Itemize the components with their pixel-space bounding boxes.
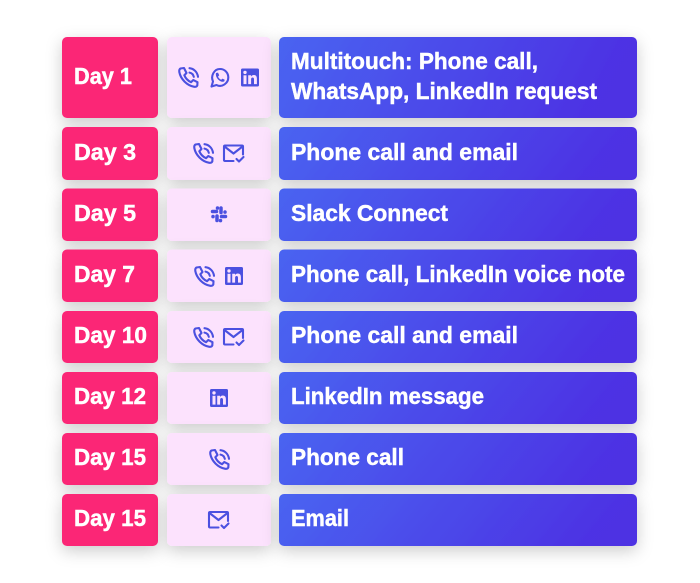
description: Phone call — [291, 444, 404, 470]
icon: Slack — [167, 188, 271, 241]
panel: Day 12 row — [62, 372, 637, 424]
day label: Day 10 — [62, 311, 158, 363]
panel: Day 3 row — [62, 127, 637, 180]
panel: Day 15 phone row — [62, 433, 637, 485]
panel: Day 1 row — [62, 37, 637, 118]
day label: Day 15 — [62, 433, 158, 485]
description: Phone call, LinkedIn voice note — [291, 261, 625, 287]
icon: phone — [167, 433, 271, 485]
day label: Day 15: Day 15 — [74, 444, 146, 470]
icon: email — [167, 494, 271, 546]
day label: Day 5: Day 5 — [74, 200, 136, 226]
day label: Day 10: Day 10 — [74, 322, 147, 348]
description: Multitouch: Phone call, — [291, 48, 538, 74]
icons: phone, LinkedIn — [167, 250, 271, 302]
description — [279, 250, 637, 302]
day label: Day 1: Day 1 — [74, 63, 132, 89]
description — [279, 37, 637, 118]
description: LinkedIn message — [291, 383, 484, 409]
icon: LinkedIn — [167, 372, 271, 424]
description: Phone call and email — [291, 139, 518, 165]
description — [279, 372, 637, 424]
day label: Day 15: Day 15 — [74, 505, 146, 531]
description — [279, 188, 637, 241]
description — [279, 494, 637, 546]
day label: Day 1 — [62, 37, 158, 118]
day label: Day 3 — [62, 127, 158, 180]
description — [279, 311, 637, 363]
description: Phone call and email — [291, 322, 518, 348]
icons: phone, WhatsApp, LinkedIn — [167, 37, 271, 118]
day label: Day 7: Day 7 — [74, 261, 135, 287]
description: Slack Connect — [291, 200, 448, 226]
icons: phone, email — [167, 127, 271, 180]
day label: Day 3: Day 3 — [74, 139, 136, 165]
day label: Day 5 — [62, 188, 158, 241]
panel: Day 7 row — [62, 250, 637, 302]
panel: Day 10 row — [62, 311, 637, 363]
panel: Day 5 row — [62, 188, 637, 241]
day label: Day 12: Day 12 — [74, 383, 146, 409]
day label: Day 15 — [62, 494, 158, 546]
description — [279, 127, 637, 180]
description: Email — [291, 505, 349, 531]
description — [279, 433, 637, 485]
day label: Day 7 — [62, 250, 158, 302]
icons: phone, email — [167, 311, 271, 363]
day label: Day 12 — [62, 372, 158, 424]
description: WhatsApp, LinkedIn request — [291, 78, 597, 104]
panel: Day 15 email row — [62, 494, 637, 546]
